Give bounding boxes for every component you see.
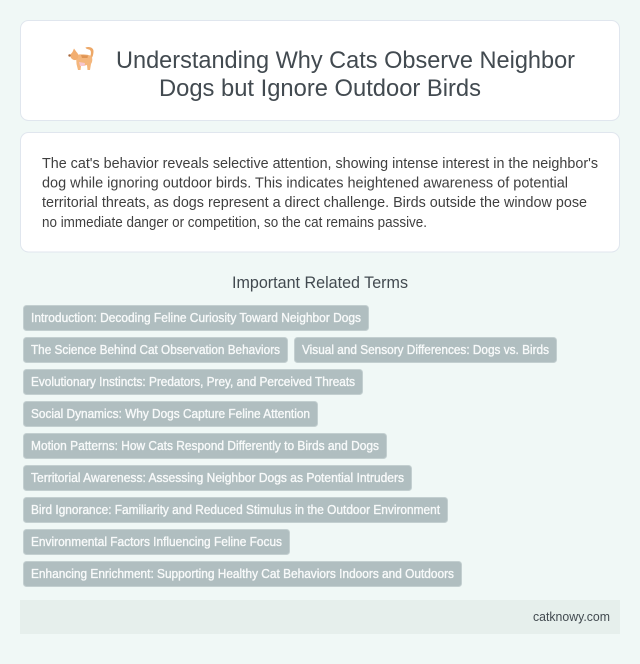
summary text	[42, 155, 598, 231]
tag: enhancing enrichment: Enhancing Enrichment: Supporting Healthy Cat Behaviors Indoors and Outdoors	[31, 567, 454, 581]
tag: science	[24, 338, 288, 362]
tag: bird ignorance: Bird Ignorance: Familiarity and Reduced Stimulus in the Outdoor Environment	[31, 503, 440, 517]
tag: environmental factors: Environmental Factors Influencing Feline Focus	[31, 535, 282, 549]
tag: social dynamics: Social Dynamics: Why Dogs Capture Feline Attention	[31, 407, 310, 421]
footer	[20, 600, 620, 634]
summary text: no immediate danger or competition, so the cat remains passive.	[42, 214, 427, 231]
section heading: important related terms: Important Related Terms	[232, 274, 408, 292]
tag: visual and sensory	[294, 338, 556, 362]
tag: enhancing enrichment	[24, 562, 462, 586]
tag: territorial awareness: Territorial Awareness: Assessing Neighbor Dogs as Potential Intruders	[31, 471, 404, 485]
tag: motion patterns: Motion Patterns: How Cats Respond Differently to Birds and Dogs	[31, 439, 379, 453]
tag: visual and sensory: Visual and Sensory Differences: Dogs vs. Birds	[302, 343, 549, 357]
tag: social dynamics	[24, 402, 318, 426]
tag: motion patterns	[24, 434, 386, 458]
heading text: Understanding Why Cats Observe Neighbor	[116, 47, 575, 74]
tag list	[24, 306, 556, 586]
tag: science: The Science Behind Cat Observation Behaviors	[31, 343, 280, 357]
heading text: Dogs but Ignore Outdoor Birds	[159, 75, 481, 102]
summary text: territorial threats, as dogs represent a direct challenge. Birds outside the window pose	[42, 194, 587, 211]
footer source text: catknowy.com	[533, 609, 610, 624]
tag: evolutionary instincts	[24, 370, 362, 394]
summary card	[20, 132, 620, 252]
tag: territorial awareness	[24, 466, 412, 490]
tag: bird ignorance	[24, 498, 448, 522]
summary text: dog while ignoring outdoor birds. This indicates heightened awareness of potential	[42, 175, 568, 192]
title card	[20, 20, 620, 120]
tag: introduction	[24, 306, 368, 330]
tag: environmental factors	[24, 530, 290, 554]
tag: evolutionary instincts: Evolutionary Instincts: Predators, Prey, and Perceived Threats	[31, 375, 355, 389]
summary text: The cat's behavior reveals selective attention, showing intense interest in the neighbor's	[42, 155, 598, 172]
heading text	[116, 47, 575, 102]
icon: cat	[68, 47, 94, 70]
tag: introduction: Introduction: Decoding Feline Curiosity Toward Neighbor Dogs	[31, 311, 361, 325]
